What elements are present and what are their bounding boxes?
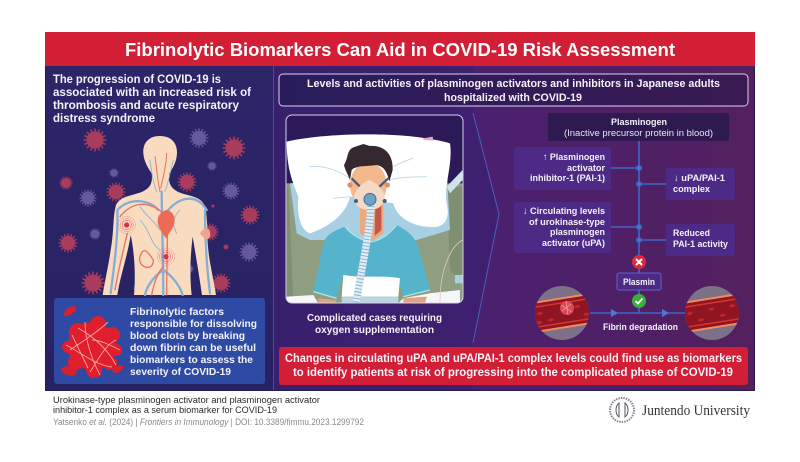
vessel with clot	[535, 286, 589, 340]
virus particles	[58, 128, 260, 294]
human body with vessels	[103, 136, 216, 295]
box: uPA/PAI-1 complex: complex	[673, 184, 711, 195]
callout text	[130, 307, 257, 378]
panel: left	[46, 66, 273, 390]
citation	[53, 395, 364, 427]
header box: Levels and activities of plasminogen activators and inhibitors in Japanese adults	[307, 78, 720, 90]
callout text: responsible for dissolving	[130, 319, 257, 330]
box: plasminogen: (Inactive precursor protein in blood)	[564, 128, 713, 139]
box: plasminogen: Plasminogen	[611, 117, 667, 128]
heading: progression of COVID-19: distress syndrome	[53, 111, 155, 125]
chevron arrow	[473, 113, 499, 343]
caption: complicated cases	[307, 312, 442, 336]
title bar	[45, 32, 755, 66]
illustration: patient with oxygen mask	[286, 115, 463, 305]
vessel cleared	[685, 286, 739, 340]
caption: complicated cases: oxygen supplementation	[315, 324, 434, 336]
box: uPA: plasminogen	[550, 227, 605, 238]
box: reduced PAI-1 activity	[666, 224, 735, 256]
box: PAI-1: ↑ Plasminogen	[543, 152, 605, 163]
callout text: Fibrinolytic factors	[130, 307, 224, 318]
panel: right	[273, 66, 754, 390]
box: reduced PAI-1 activity: Reduced	[673, 228, 710, 239]
box: uPA: ↓ Circulating levels	[523, 206, 605, 217]
heading: progression of COVID-19: The progression of COVID-19 is	[53, 72, 221, 86]
conclusion box: to identify patients at risk of progressing into the complicated phase of COVID-19	[293, 365, 733, 379]
citation: Yatsenko et al. (2024) | Frontiers in Immunology | DOI: 10.3389/fimmu.2023.1299792	[53, 417, 364, 427]
logo: Juntendo University: Juntendo University	[642, 403, 751, 419]
callout text: down fibrin can be useful	[130, 343, 256, 354]
heading: progression of COVID-19	[53, 72, 252, 125]
callout text: biomarkers to assess the	[130, 355, 253, 366]
callout: fibrinolytic factors	[54, 298, 265, 384]
box: PAI-1	[514, 147, 611, 190]
header box	[279, 74, 748, 106]
box: uPA/PAI-1 complex: ↓ uPA/PAI-1	[674, 173, 726, 184]
box: plasmin	[617, 273, 661, 290]
heading: progression of COVID-19: associated with an increased risk of	[53, 85, 252, 99]
title bar: Fibrinolytic Biomarkers Can Aid in COVID-19 Risk Assessment	[125, 39, 676, 60]
icon: green check	[632, 294, 646, 308]
callout text: blood clots by breaking	[130, 331, 245, 342]
icon: red cross	[632, 255, 646, 269]
flowchart: plasminogen pathway	[514, 113, 746, 340]
box: uPA: activator (uPA)	[542, 238, 605, 249]
callout text: severity of COVID-19	[130, 367, 231, 378]
heading: progression of COVID-19: thrombosis and acute respiratory	[53, 98, 239, 112]
main panel background	[45, 32, 755, 391]
label: fibrin degradation: Fibrin degradation	[603, 322, 678, 333]
box: PAI-1: inhibitor-1 (PAI-1)	[530, 173, 605, 184]
box: PAI-1: activator	[567, 163, 605, 174]
box: uPA/PAI-1 complex	[666, 168, 735, 200]
connector lines	[590, 141, 686, 317]
box: reduced PAI-1 activity: PAI-1 activity	[673, 239, 729, 250]
citation: Urokinase-type plasminogen activator and plasminogen activator	[53, 395, 321, 406]
logo: Juntendo University	[610, 398, 751, 422]
box: uPA	[514, 202, 611, 253]
header box: hospitalized with COVID-19	[444, 92, 582, 104]
box: plasminogen	[548, 113, 729, 141]
conclusion box	[279, 347, 748, 385]
citation: inhibitor-1 complex as a serum biomarker for COVID-19	[53, 405, 277, 416]
caption: complicated cases: Complicated cases requiring	[307, 312, 442, 324]
box: uPA: of urokinase-type	[529, 217, 605, 228]
box: plasmin: Plasmin	[623, 277, 655, 288]
icon: blood clot	[60, 304, 125, 378]
conclusion box: Changes in circulating uPA and uPA/PAI-1 complex levels could find use as biomarkers	[285, 351, 742, 365]
